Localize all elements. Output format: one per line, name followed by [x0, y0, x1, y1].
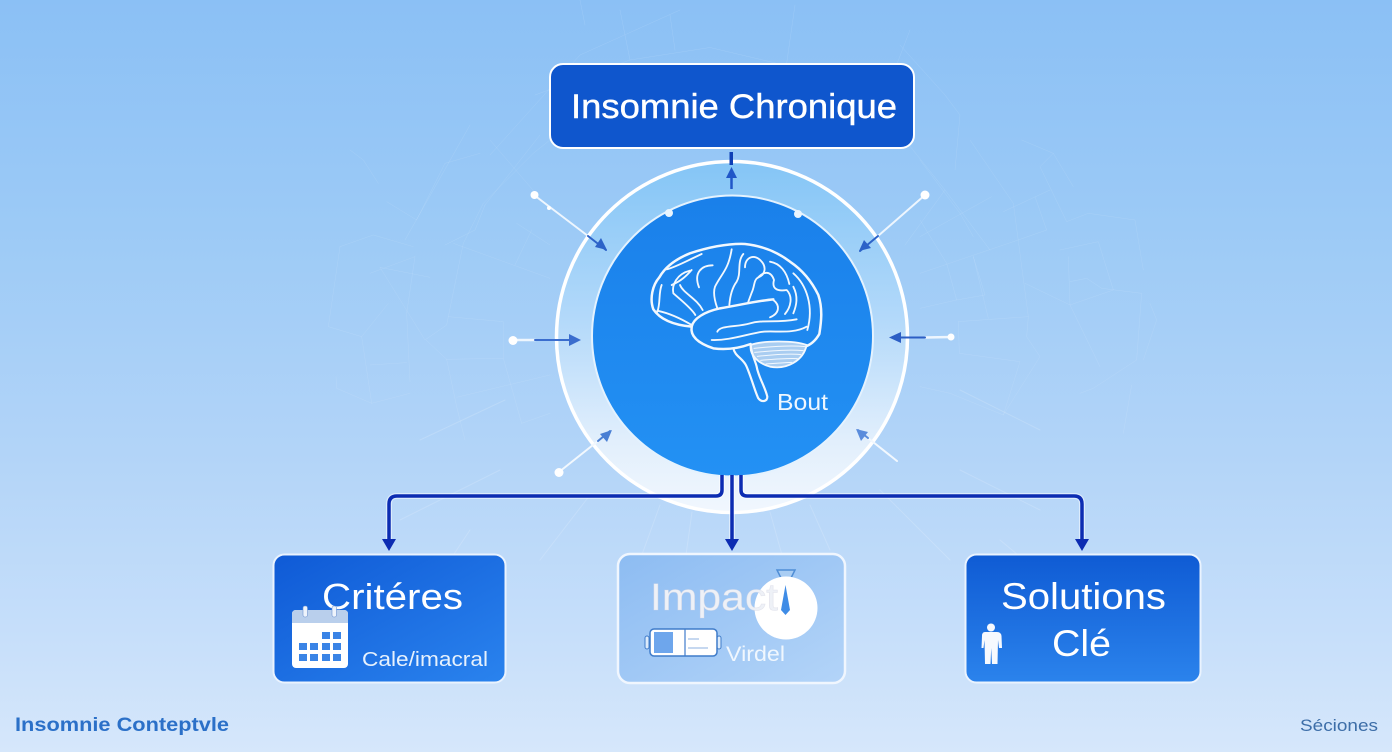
heading: clé: Clé	[1052, 623, 1111, 664]
icon: person	[982, 624, 1002, 664]
footer: right label: Séciones	[1300, 716, 1378, 735]
connector: right	[741, 475, 1082, 541]
brainstem	[733, 345, 767, 401]
heading: solutions: Solutions	[1001, 576, 1166, 617]
connector: centre	[730, 475, 734, 541]
inner disc	[592, 196, 873, 476]
arrowheads	[382, 539, 1089, 551]
arrow: north-east	[859, 190, 930, 251]
label: virdel: Virdel	[726, 643, 785, 666]
panel: solutions	[966, 554, 1200, 682]
heading: impact: Impact	[650, 577, 778, 619]
arrow: west	[508, 334, 581, 346]
icon: battery	[645, 629, 721, 656]
central circle	[556, 162, 908, 512]
arrow: north-west	[530, 191, 607, 250]
outer ring	[556, 162, 908, 512]
icon: brain	[652, 244, 821, 401]
icon: calendar	[292, 606, 348, 668]
arrow: east	[889, 332, 954, 343]
background network lines	[328, 0, 1157, 590]
arrow: south-east	[856, 429, 897, 461]
cerebellum	[751, 341, 807, 367]
icon: stopwatch	[754, 570, 818, 640]
label: calendrier: Cale/imacral	[362, 649, 488, 671]
title text: Insomnie Chronique	[571, 88, 897, 126]
panel: critères	[274, 554, 506, 682]
connector halo	[389, 475, 1082, 540]
arrow: south-west	[554, 430, 612, 477]
panel: impact	[618, 554, 845, 683]
connector: left	[389, 475, 722, 541]
heading: critères: Critéres	[322, 576, 463, 617]
footer: left label: Insomnie Conteptvle	[15, 715, 229, 736]
title box	[550, 64, 914, 148]
ring nodes	[665, 209, 802, 218]
arrow: top	[726, 152, 737, 189]
connectors	[382, 475, 1089, 551]
label: Bout: Bout	[777, 389, 829, 415]
